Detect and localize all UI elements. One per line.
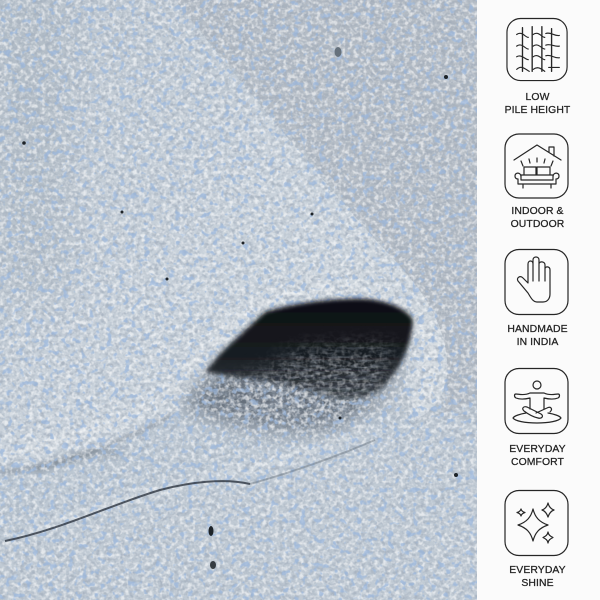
second fold highlight	[30, 430, 365, 530]
panel: features	[477, 0, 600, 600]
lower crease line	[5, 481, 250, 541]
label: OUTDOOR	[511, 219, 564, 230]
feature: indoor and outdoor	[504, 133, 569, 230]
label	[509, 444, 566, 468]
rug photo	[0, 0, 477, 600]
crease shade	[35, 453, 125, 472]
far rug horizontal knit	[178, 0, 477, 420]
fold highlight	[10, 290, 430, 452]
lower rug surface	[0, 400, 477, 600]
label: EVERYDAY	[509, 444, 566, 455]
label	[511, 206, 564, 230]
label	[507, 324, 568, 348]
icon: hand	[504, 248, 569, 316]
blue fleck texture	[0, 0, 477, 600]
label: SHINE	[521, 578, 554, 589]
upper folded rug	[0, 0, 447, 466]
under-fold shaded layer	[0, 390, 420, 540]
inner knit	[222, 334, 402, 428]
soft left shade	[0, 0, 70, 300]
rug background	[0, 0, 477, 600]
fold underside shadow	[0, 416, 170, 472]
feature: everyday shine	[504, 490, 569, 589]
feature: handmade in India	[504, 248, 569, 348]
label: IN INDIA	[517, 337, 558, 348]
label	[505, 92, 570, 116]
icon: house with sofa	[504, 133, 569, 199]
feature: low pile height	[505, 18, 570, 116]
label: EVERYDAY	[509, 565, 566, 576]
feature: everyday comfort	[504, 368, 569, 468]
label: HANDMADE	[507, 324, 568, 335]
icon: meditation pose	[504, 368, 569, 434]
label	[509, 565, 566, 589]
icon: pile weave	[506, 18, 568, 82]
dark opening	[205, 299, 413, 399]
label: PILE HEIGHT	[505, 105, 570, 116]
icon: sparkles	[504, 490, 569, 556]
knit texture	[0, 0, 477, 600]
opening shadow	[180, 313, 399, 431]
label: LOW	[526, 92, 549, 103]
dark flecks	[22, 47, 458, 569]
label: COMFORT	[511, 457, 564, 468]
label: INDOOR &	[511, 206, 564, 217]
far rug surface	[175, 0, 477, 600]
white yarn texture	[0, 0, 477, 600]
crease shadow	[250, 440, 375, 484]
